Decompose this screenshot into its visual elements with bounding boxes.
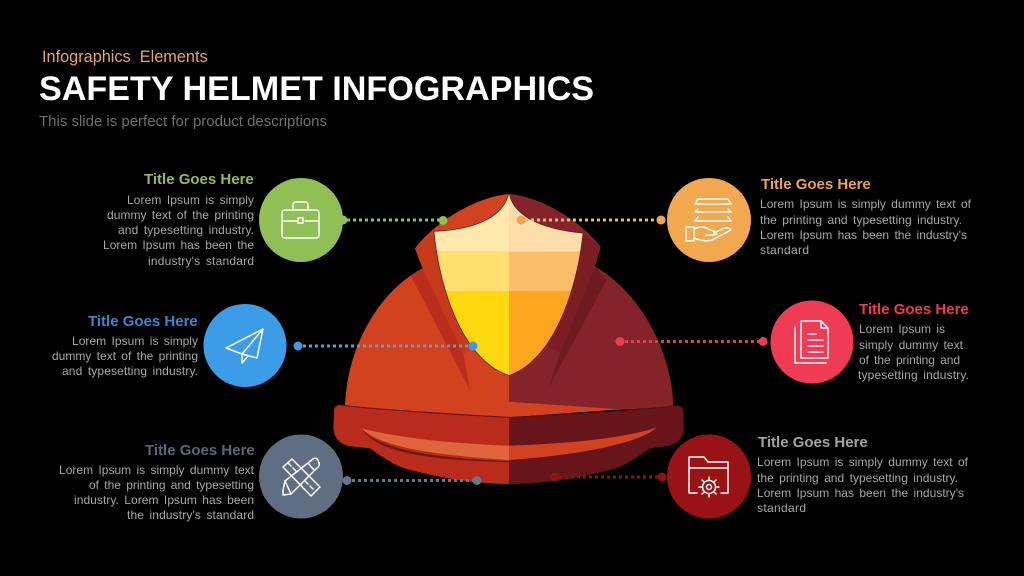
green circle (259, 178, 343, 262)
red body text: typesetting industry. (858, 368, 969, 382)
dark red body text: the printing and typesetting industry. (757, 471, 958, 485)
green connector (338, 216, 448, 225)
dark red circle (667, 434, 751, 518)
item: blue paper plane (52, 304, 478, 387)
orange body text (760, 197, 972, 257)
dark red body text (757, 455, 969, 515)
title: SAFETY HELMET INFOGRAPHICS (39, 70, 594, 108)
slate circle (259, 434, 343, 518)
orange body text: Lorem Ipsum has been the industry's (760, 228, 967, 242)
blue body text: dummy text of the printing (52, 349, 198, 363)
item: slate tools (59, 434, 482, 522)
green body text: industry's standard (148, 254, 254, 268)
orange body text: standard (760, 243, 809, 257)
green body text: Lorem Ipsum has been the (103, 238, 254, 252)
slate title: Title Goes Here (145, 442, 255, 459)
icon: document (795, 321, 828, 363)
helmet illustration (333, 190, 684, 484)
subtitle: This slide is perfect for product descriptions (39, 113, 327, 130)
blue title: Title Goes Here (88, 313, 198, 330)
dark red title: Title Goes Here (758, 434, 868, 451)
orange body text: the printing and typesetting industry. (760, 213, 962, 227)
icon: paper plane (226, 329, 263, 363)
orange connector (516, 216, 666, 224)
red body text: Lorem Ipsum is (859, 322, 945, 336)
dark red body text: standard (757, 501, 806, 515)
dark red body text: Lorem Ipsum is simply dummy text of (757, 455, 969, 469)
blue body text: Lorem Ipsum is simply (72, 334, 198, 348)
item: red document (616, 300, 969, 384)
header (39, 48, 594, 130)
green body text (103, 193, 254, 268)
icon: pencil and ruler (283, 458, 320, 496)
red connector (616, 337, 768, 346)
blue connector (294, 342, 478, 350)
green body text: Lorem Ipsum is simply (127, 193, 254, 207)
orange title: Title Goes Here (761, 176, 871, 193)
eyebrow: Infographics Elements (42, 48, 208, 66)
green body text: dummy text of the printing (107, 208, 254, 222)
orange circle (667, 178, 751, 262)
icon: folder with gear (689, 457, 728, 497)
slate body text: of the printing and typesetting (89, 478, 254, 492)
blue body text (52, 334, 198, 378)
slate connector (342, 476, 482, 485)
dark red connector (550, 472, 666, 482)
slate body text (59, 463, 255, 522)
red circle (770, 300, 854, 384)
red title: Title Goes Here (859, 301, 969, 318)
item: green briefcase (103, 171, 448, 268)
blue body text: and typesetting industry. (62, 364, 198, 378)
orange body text: Lorem Ipsum is simply dummy text of (760, 197, 972, 211)
dark red body text: Lorem Ipsum has been the industry's (757, 486, 964, 500)
red body text: of the printing and (859, 353, 960, 367)
item: dark red folder (550, 434, 969, 518)
blue circle (204, 304, 286, 387)
red body text: simply dummy text (859, 338, 964, 352)
slate body text: industry. Lorem Ipsum has been (74, 493, 254, 507)
red body text (858, 322, 969, 382)
icon: briefcase (282, 202, 319, 238)
green body text: and typesetting industry. (118, 223, 254, 237)
green title: Title Goes Here (144, 171, 254, 188)
item: orange hand (516, 176, 972, 262)
slate body text: Lorem Ipsum is simply dummy text (59, 463, 255, 477)
icon: hand with layers (686, 199, 731, 241)
slate body text: the industry's standard (127, 508, 254, 522)
